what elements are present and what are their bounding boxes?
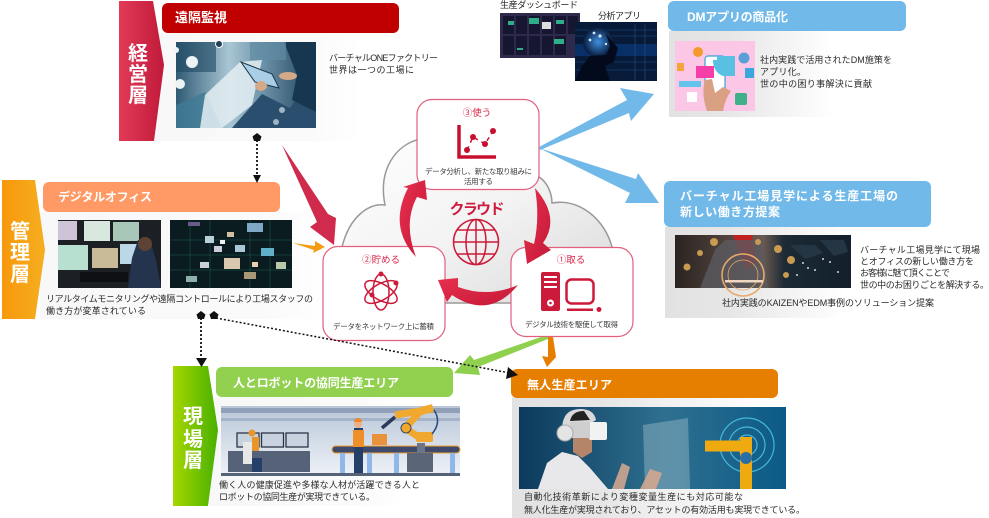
box: store: データをネットワーク上に蓄積: [333, 321, 434, 331]
label: cloud: クラウド: [450, 201, 504, 218]
image: hand holding phone: [675, 41, 755, 111]
text: virtual tour description: バーチャル工場見学にて現場: [860, 244, 980, 255]
tab: 現場層: [173, 366, 218, 506]
arrow: orange to unmanned area: [542, 337, 556, 367]
arrow: store to use: [400, 180, 427, 257]
image: floating video wall: [170, 220, 292, 288]
dotted arrow: control to field: [196, 311, 207, 367]
text: human robot description: [219, 479, 420, 502]
box: collect: [511, 248, 633, 336]
icon: globe: [454, 220, 498, 264]
box: use: [417, 100, 539, 190]
cloud diagram: [323, 100, 633, 340]
text: DM description: 世の中の困り事解決に貢献: [760, 78, 872, 89]
image: tablet in factory: [173, 40, 316, 128]
text: virtual tour description: とオフィスの新しい働き方を: [860, 256, 974, 266]
panel: control layer: [2, 180, 335, 319]
arrow: orange to cloud: [293, 241, 325, 253]
heading: DM app commercialization: [668, 1, 906, 31]
text: KAIZEN solutions: 社内実践のKAIZENやEDM事例のソリューション提案: [722, 297, 934, 308]
arrow: collect to store: [438, 278, 518, 305]
tab: 経営層: 経: [128, 42, 148, 65]
tab: 経営層: [119, 1, 164, 141]
box: collect: ①取る: [557, 255, 585, 266]
tab: 現場層: 場: [183, 428, 203, 451]
heading: virtual factory proposal: 新しい働き方提案: [680, 204, 780, 219]
heading: 無人生産エリア: 無人生産エリア: [527, 377, 612, 392]
heading: DM app commercialization: DMアプリの商品化: [687, 9, 788, 24]
image: dashboard: [500, 13, 580, 58]
icon: line chart: [459, 125, 496, 157]
tab: 現場層: 層: [183, 450, 203, 472]
image: AI head: [575, 22, 657, 81]
arrow: use to collect: [524, 188, 551, 264]
heading: デジタルオフィス: [43, 182, 280, 212]
heading: human robot area: [216, 367, 453, 397]
heading: デジタルオフィス: デジタルオフィス: [58, 189, 152, 204]
tab: 経営層: 営: [128, 63, 148, 86]
heading: 無人生産エリア: [511, 369, 778, 398]
tab: 管理層: [2, 180, 45, 319]
tab: 管理層: 層: [10, 264, 30, 286]
label: production dashboard: 生産ダッシュボード: [500, 0, 578, 10]
text: virtual one factory: 世界は一つの工場に: [329, 64, 414, 75]
dotted arrow: control to unmanned: [210, 311, 518, 379]
box: store: ②貯める: [362, 255, 400, 266]
text: real-time monitoring: リアルタイムモニタリングや遠隔コントロールにより工場スタッフの: [46, 293, 313, 304]
box: use: ③使う: [463, 107, 491, 119]
arrow: blue to DM app: [539, 88, 654, 150]
heading: virtual factory proposal: [664, 181, 931, 227]
arrow: red to cloud: [282, 145, 336, 245]
box: collect: デジタル技術を駆使して取得: [525, 319, 618, 329]
arrow: green to human robot area: [454, 337, 553, 375]
text: DM description: アプリ化。: [760, 67, 806, 77]
box: use: データ分析し、新たな取り組みに: [425, 166, 532, 176]
tab: 現場層: 現: [183, 406, 203, 428]
text: human robot description: 働く人の健康促進や多様な人材が活躍できる人と: [219, 479, 420, 490]
panel: unmanned area: [511, 369, 805, 518]
icon: atom: [361, 272, 401, 310]
text: unmanned description: 無人化生産が実現されており、アセットの有効活用も実現できている。: [524, 504, 805, 515]
images: dashboard and analytics app: [500, 0, 657, 81]
text: virtual tour description: [860, 244, 989, 290]
icon: computer: [541, 272, 602, 312]
image: businessman and world map: [675, 235, 851, 296]
heading: 遠隔監視: 遠隔監視: [175, 10, 227, 25]
tab: 管理層: 管: [10, 220, 30, 243]
text: DM description: 社内実践で活用されたDM施策を: [760, 54, 892, 65]
text: unmanned description: 自動化技術革新により変種変量生産にも対応可能な: [524, 491, 743, 502]
image: monitoring room: [58, 220, 161, 288]
arrow: blue to virtual tour: [539, 148, 659, 203]
text: real-time monitoring: [46, 293, 313, 316]
text: human robot description: ロボットの協同生産が実現できている。: [219, 491, 375, 502]
label: analytics app: 分析アプリ: [598, 10, 641, 21]
panel: DM app: [668, 1, 906, 117]
box: store: [323, 246, 445, 340]
panel: management layer: [119, 1, 438, 141]
text: virtual tour description: お客様に魅て頂くことで: [860, 267, 950, 278]
heading: human robot area: 人とロボットの協同生産エリア: [233, 375, 399, 390]
text: unmanned description: [524, 491, 805, 515]
panel: virtual factory tour: [664, 181, 989, 318]
text: virtual one factory: バーチャルONEファクトリー: [329, 53, 438, 63]
cloud shape: [342, 139, 612, 303]
box: use: 活用する: [464, 176, 493, 186]
heading: 遠隔監視: [162, 3, 399, 33]
text: virtual tour description: 世の中のお困りごとを解決する。: [860, 279, 989, 290]
heading: virtual factory proposal: バーチャル工場見学による生産工場の: [680, 188, 898, 203]
tab: 管理層: 理: [10, 242, 30, 264]
text: virtual one factory: [329, 53, 438, 75]
text: real-time monitoring: 働き方が変革されている: [46, 305, 146, 316]
dotted arrow: top to control: [252, 133, 262, 183]
image: human and robot factory: [221, 406, 460, 476]
tab: 経営層: 層: [128, 85, 148, 107]
text: DM description: [760, 54, 892, 89]
image: VR engineer and robot: [519, 407, 786, 489]
panel: field layer: [173, 366, 460, 506]
